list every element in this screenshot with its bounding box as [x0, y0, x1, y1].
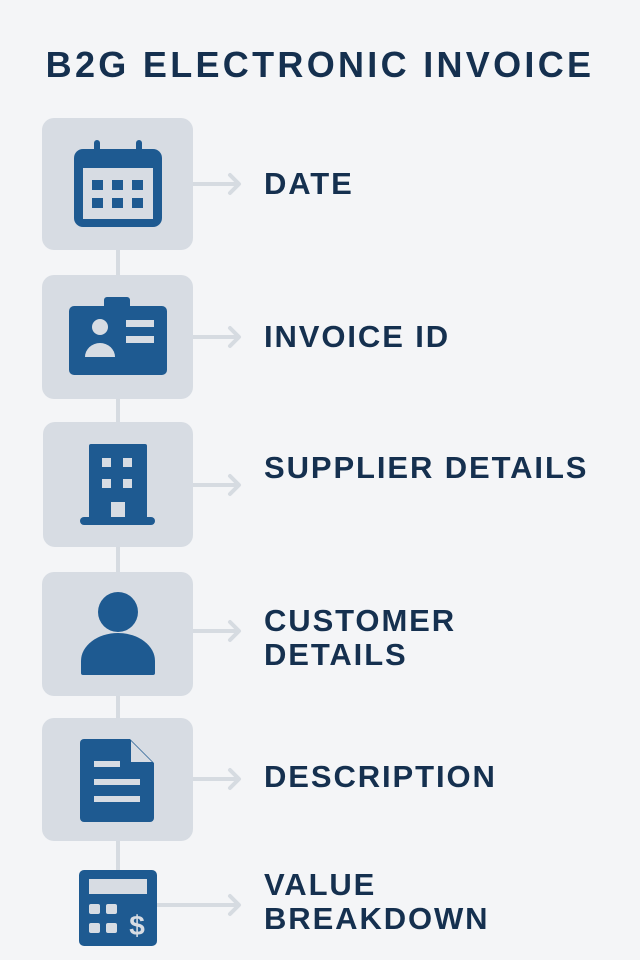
- label: date: DATE: [264, 166, 354, 201]
- icon: calculator: $: [129, 910, 145, 941]
- label: customer details: CUSTOMER: [264, 603, 456, 638]
- label: value breakdown: VALUE: [264, 867, 376, 902]
- label: customer details: [264, 603, 456, 672]
- label: supplier details: SUPPLIER DETAILS: [264, 450, 588, 485]
- arrows: [157, 175, 239, 914]
- connector line: [116, 240, 120, 880]
- box: customer: [42, 572, 193, 696]
- icon: calculator: [79, 870, 157, 946]
- title: B2G ELECTRONIC INVOICE: [46, 44, 594, 85]
- label: value breakdown: BREAKDOWN: [264, 901, 489, 936]
- box: date: [42, 118, 193, 250]
- label: description: DESCRIPTION: [264, 759, 497, 794]
- label: value breakdown: [264, 867, 489, 936]
- label: invoice id: INVOICE ID: [264, 319, 450, 354]
- box: description: [42, 718, 193, 841]
- label: customer details: DETAILS: [264, 637, 408, 672]
- box: invoice id: [42, 275, 193, 399]
- box: supplier: [43, 422, 193, 547]
